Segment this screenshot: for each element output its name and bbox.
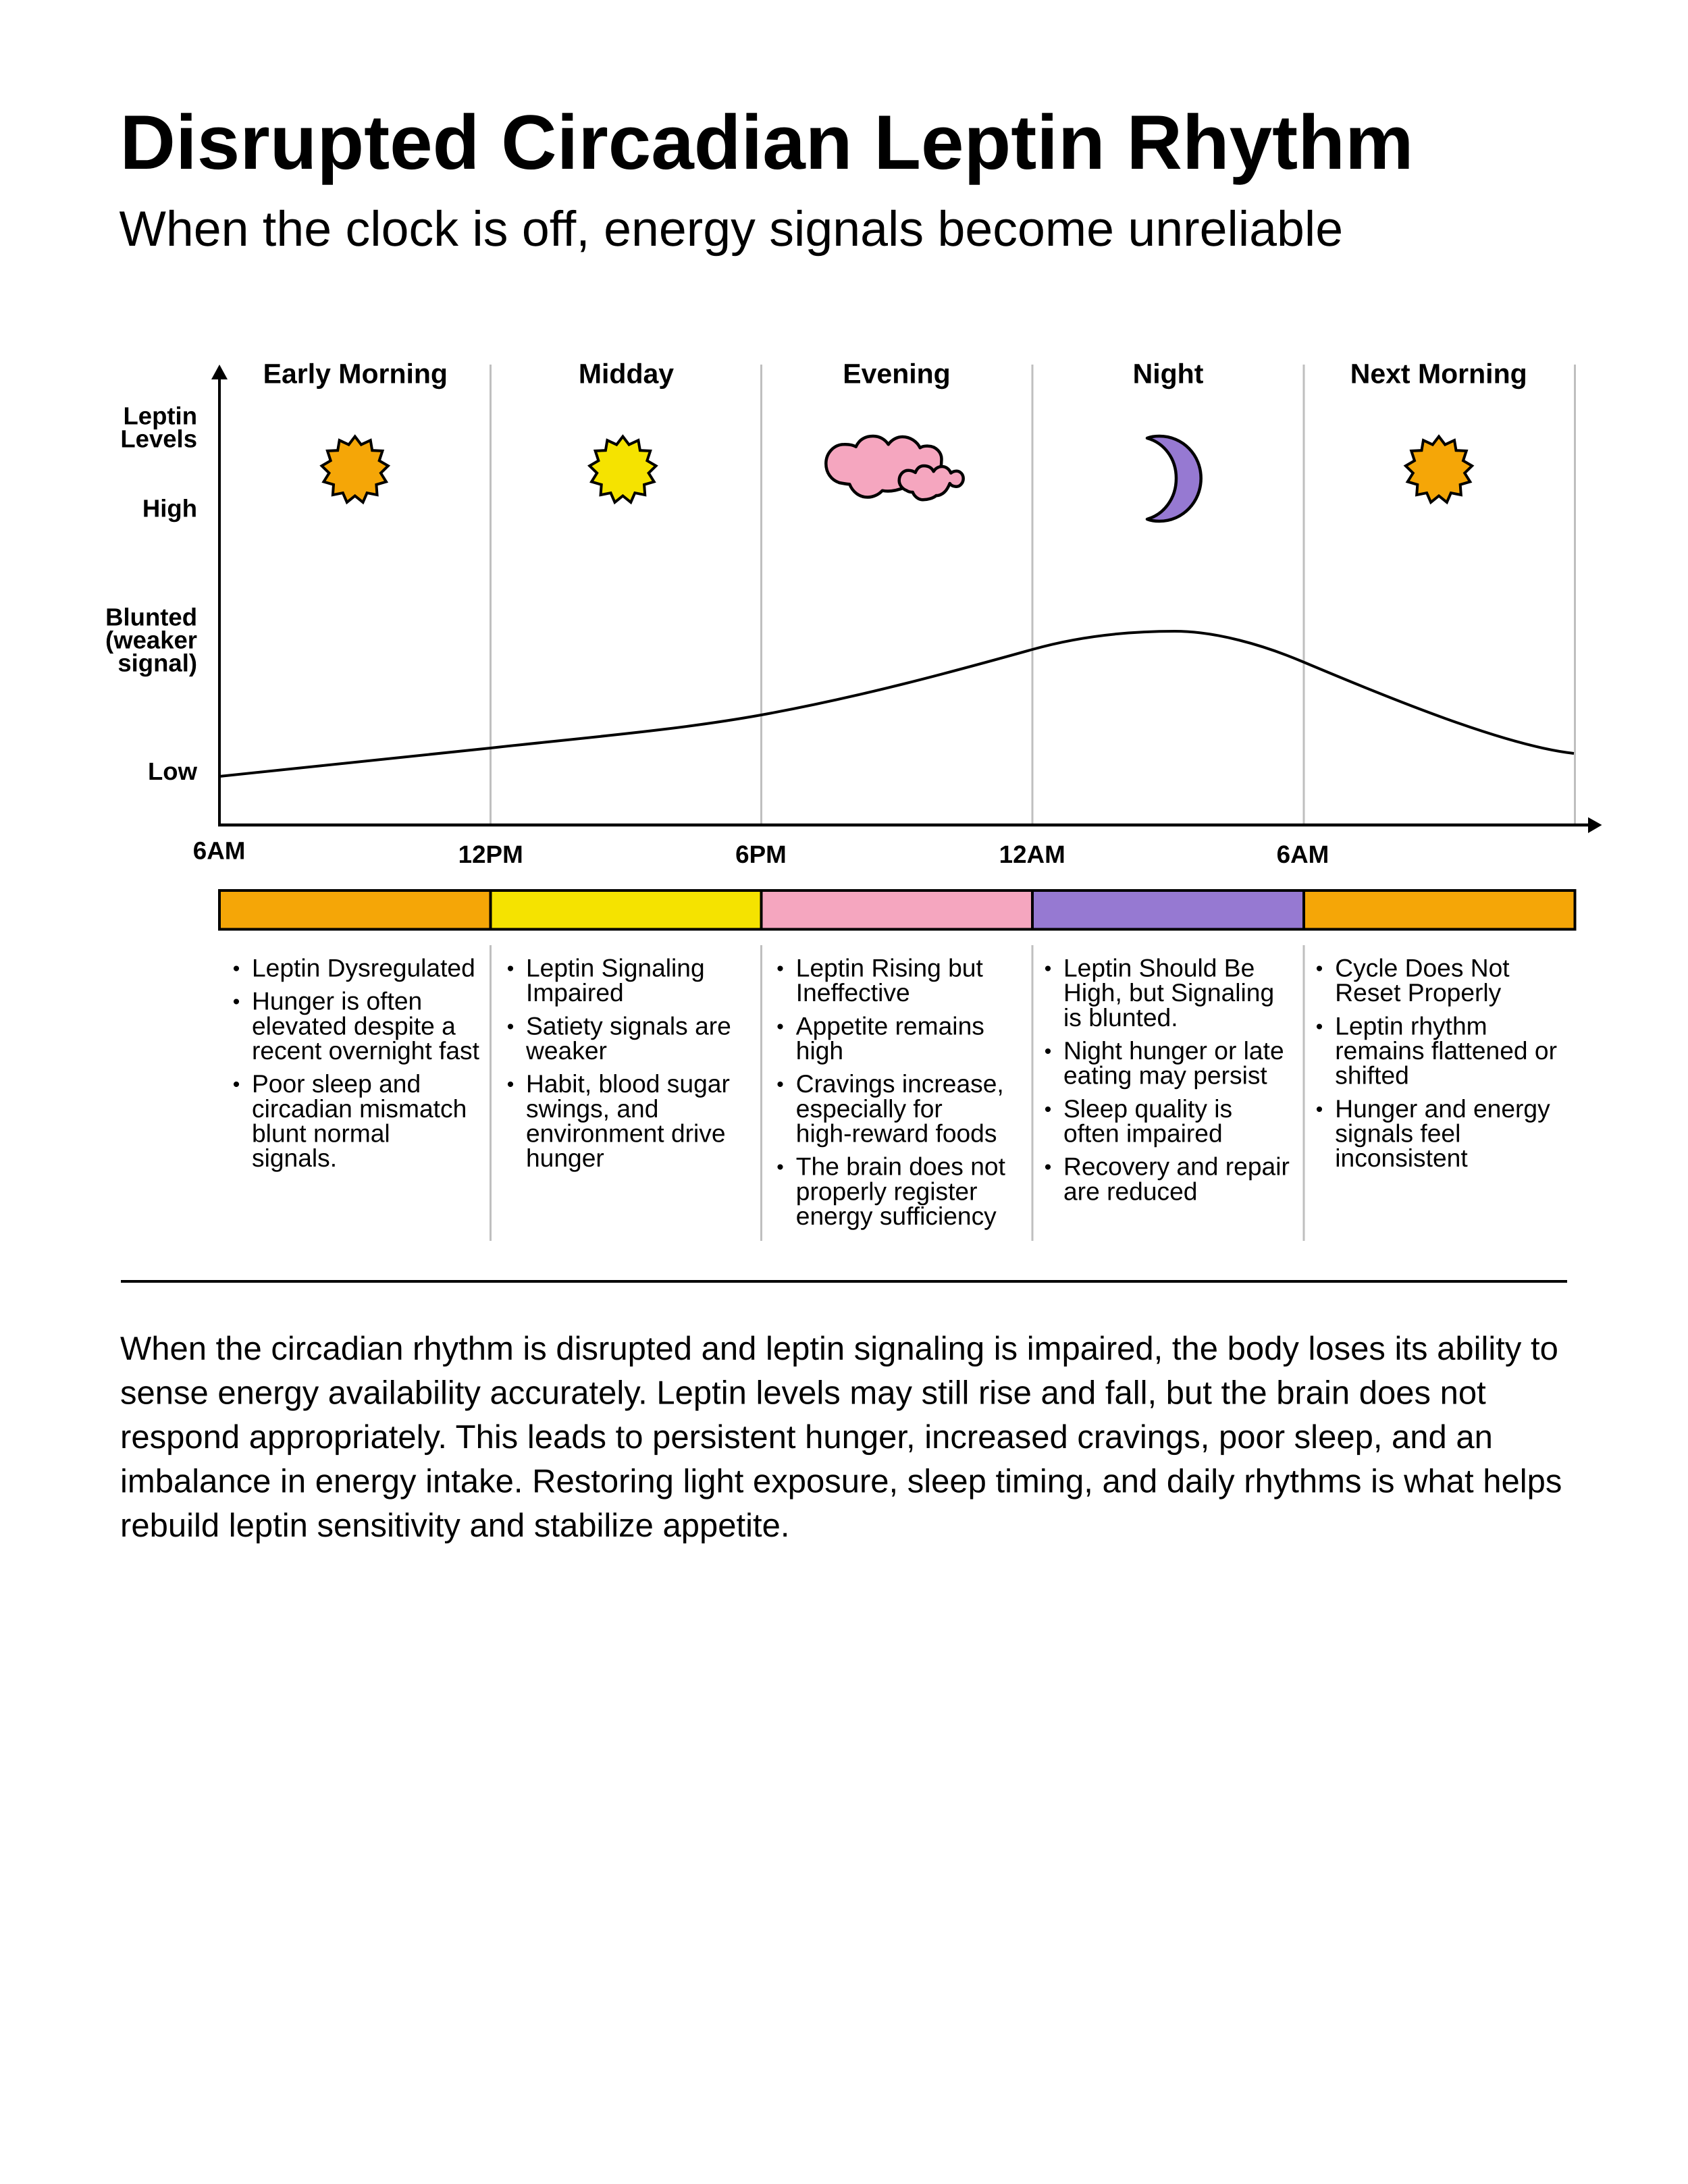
y-axis labels: signal) xyxy=(117,649,197,676)
summary paragraph: sense energy availability accurately. Leptin levels may still rise and fall, but the brain does not xyxy=(120,1375,1486,1411)
panel: early morning bullets: recent overnight fast xyxy=(252,1036,480,1065)
icon: crescent moon xyxy=(1147,436,1201,521)
panel: early morning bullets: Hunger is often xyxy=(252,987,422,1015)
time tick labels xyxy=(193,836,1329,868)
panel: night bullets: • xyxy=(1045,957,1051,980)
summary paragraph: respond appropriately. This leads to persistent hunger, increased cravings, poor sleep, and an xyxy=(120,1419,1493,1456)
y-axis labels: Leptin xyxy=(124,402,197,429)
panel: next morning bullets: Leptin rhythm xyxy=(1335,1011,1487,1040)
panel: early morning bullets: • xyxy=(233,957,240,980)
panel: night bullets xyxy=(1045,953,1290,1205)
panel: night bullets: are reduced xyxy=(1063,1177,1197,1205)
summary paragraph: When the circadian rhythm is disrupted and leptin signaling is impaired, the body loses its ability to xyxy=(120,1331,1558,1367)
y axis arrow xyxy=(211,365,228,826)
period headings: Next Morning xyxy=(1350,358,1527,390)
panel: evening bullets: • xyxy=(776,1073,784,1096)
panel: midday bullets: Impaired xyxy=(526,978,624,1007)
panel: midday bullets: environment drive xyxy=(526,1119,726,1148)
panel: next morning bullets: inconsistent xyxy=(1335,1144,1468,1172)
panel: night bullets: High, but Signaling xyxy=(1063,978,1274,1007)
panel: night bullets: • xyxy=(1045,1098,1051,1121)
time tick labels: 6PM xyxy=(735,841,787,868)
panel: evening bullets: high xyxy=(796,1036,843,1065)
panel: night bullets: Night hunger or late xyxy=(1063,1036,1284,1065)
y-axis labels: (weaker xyxy=(105,626,197,654)
period headings: Early Morning xyxy=(263,358,448,390)
panel: evening bullets: especially for xyxy=(796,1094,943,1123)
period headings: Evening xyxy=(843,358,951,390)
icon: midday sun xyxy=(589,436,656,502)
panel: night bullets: Recovery and repair xyxy=(1063,1152,1290,1181)
panel: next morning bullets: • xyxy=(1316,1015,1323,1038)
panel: early morning bullets: circadian mismatch xyxy=(252,1094,467,1123)
panel: midday bullets: Leptin Signaling xyxy=(526,953,705,982)
panel: night bullets: Leptin Should Be xyxy=(1063,953,1255,982)
panel: evening bullets: • xyxy=(776,1156,784,1179)
panel: evening bullets: • xyxy=(776,957,784,980)
time tick labels: 12PM xyxy=(458,841,523,868)
panel: next morning bullets: Cycle Does Not xyxy=(1335,953,1510,982)
panel: evening bullets: Cravings increase, xyxy=(796,1069,1004,1098)
panel: midday bullets: • xyxy=(507,1073,514,1096)
summary paragraph: imbalance in energy intake. Restoring light exposure, sleep timing, and daily rhythms is what helps xyxy=(120,1464,1562,1500)
y-axis labels: Blunted xyxy=(105,603,197,631)
panel: midday bullets xyxy=(507,953,731,1172)
y-axis labels: Low xyxy=(148,757,198,785)
panel: evening bullets xyxy=(776,953,1006,1230)
panel: midday bullets: weaker xyxy=(525,1036,607,1065)
panel: night bullets: • xyxy=(1045,1156,1051,1179)
chart gridlines xyxy=(490,365,1575,825)
panel: evening bullets: Leptin Rising but xyxy=(796,953,983,982)
panel: midday bullets: • xyxy=(507,1015,514,1038)
period headings xyxy=(263,358,1527,390)
panel: midday bullets: swings, and xyxy=(526,1094,658,1123)
panel: evening bullets: The brain does not xyxy=(796,1152,1006,1181)
panel: midday bullets: • xyxy=(507,957,514,980)
panel: night bullets: Sleep quality is xyxy=(1063,1094,1232,1123)
panel: early morning bullets: Poor sleep and xyxy=(252,1069,421,1098)
summary paragraph xyxy=(120,1331,1562,1544)
panel: evening bullets: energy sufficiency xyxy=(796,1202,997,1230)
panel: early morning bullets: elevated despite a xyxy=(252,1011,456,1040)
y-axis labels xyxy=(105,402,198,785)
y-axis labels: High xyxy=(142,495,197,523)
panel: early morning bullets: • xyxy=(233,991,240,1013)
summary paragraph: rebuild leptin sensitivity and stabilize appetite. xyxy=(120,1508,789,1544)
panel: night bullets: is blunted. xyxy=(1063,1003,1178,1032)
panel: night bullets: eating may persist xyxy=(1063,1061,1267,1090)
panel: evening bullets: high-reward foods xyxy=(796,1119,997,1148)
time tick labels: 6AM xyxy=(1277,841,1329,868)
panel: early morning bullets xyxy=(233,953,480,1172)
time tick labels: 12AM xyxy=(999,841,1065,868)
period headings: Night xyxy=(1133,358,1204,390)
panel: evening bullets: properly register xyxy=(796,1177,977,1205)
icon: evening clouds xyxy=(826,436,964,500)
panel: midday bullets: Satiety signals are xyxy=(526,1011,731,1040)
panel: early morning bullets: blunt normal xyxy=(252,1119,390,1148)
title: Disrupted Circadian Leptin Rhythm xyxy=(120,100,1414,186)
panel: next morning bullets: signals feel xyxy=(1335,1119,1460,1148)
subtitle: When the clock is off, energy signals become unreliable xyxy=(119,201,1343,257)
icon: next morning sun xyxy=(1406,436,1472,502)
panel: next morning bullets xyxy=(1316,953,1557,1172)
x axis arrow xyxy=(218,817,1602,833)
panel: next morning bullets: remains flattened or xyxy=(1335,1036,1557,1065)
panel: early morning bullets: Leptin Dysregulated xyxy=(252,953,475,982)
panel: midday bullets: Habit, blood sugar xyxy=(526,1069,730,1098)
panel: midday bullets: hunger xyxy=(526,1144,604,1172)
time tick labels: 6AM xyxy=(193,836,245,864)
panel: early morning bullets: • xyxy=(233,1073,240,1096)
colored timeline bar xyxy=(219,890,1575,929)
icon: early morning sun xyxy=(322,436,388,502)
leptin curve xyxy=(219,631,1574,776)
y-axis labels: Levels xyxy=(120,425,197,452)
panel: night bullets: often impaired xyxy=(1063,1119,1223,1148)
panel: next morning bullets: shifted xyxy=(1335,1061,1409,1090)
period headings: Midday xyxy=(579,358,674,390)
panel: night bullets: • xyxy=(1045,1040,1051,1063)
panel: evening bullets: Ineffective xyxy=(796,978,910,1007)
panel: evening bullets: Appetite remains xyxy=(796,1011,984,1040)
panel: next morning bullets: • xyxy=(1316,1098,1323,1121)
chart: leptin rhythm over time xyxy=(105,358,1602,868)
panel: next morning bullets: • xyxy=(1316,957,1323,980)
panel: early morning bullets: signals. xyxy=(252,1144,337,1172)
panel: next morning bullets: Reset Properly xyxy=(1335,978,1502,1007)
panel: evening bullets: • xyxy=(776,1015,784,1038)
panel: next morning bullets: Hunger and energy xyxy=(1335,1094,1550,1123)
column dividers xyxy=(490,945,1304,1241)
